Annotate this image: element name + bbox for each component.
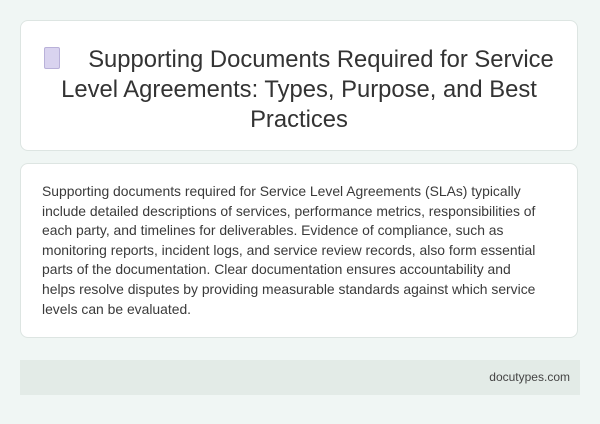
title card [20, 20, 578, 151]
description text: Supporting documents required for Service Level Agreements (SLAs) typically include detailed descriptions of services, performance metrics, responsibilities of each party, and timelines for deliverables. Evidence of compliance, such as monitoring reports, incident logs, and service review records, also form essential parts of the documentation. Clear documentation ensures accountability and helps resolve disputes by providing measurable standards against which service levels can be evaluated. [42, 183, 535, 317]
description panel [20, 163, 578, 338]
footer text: docutypes.com [489, 370, 570, 384]
icon: document [44, 47, 60, 69]
title: Supporting Documents Required for Service Level Agreements: Types, Purpose, and Best Practices [61, 46, 554, 133]
footer bar [20, 360, 580, 395]
